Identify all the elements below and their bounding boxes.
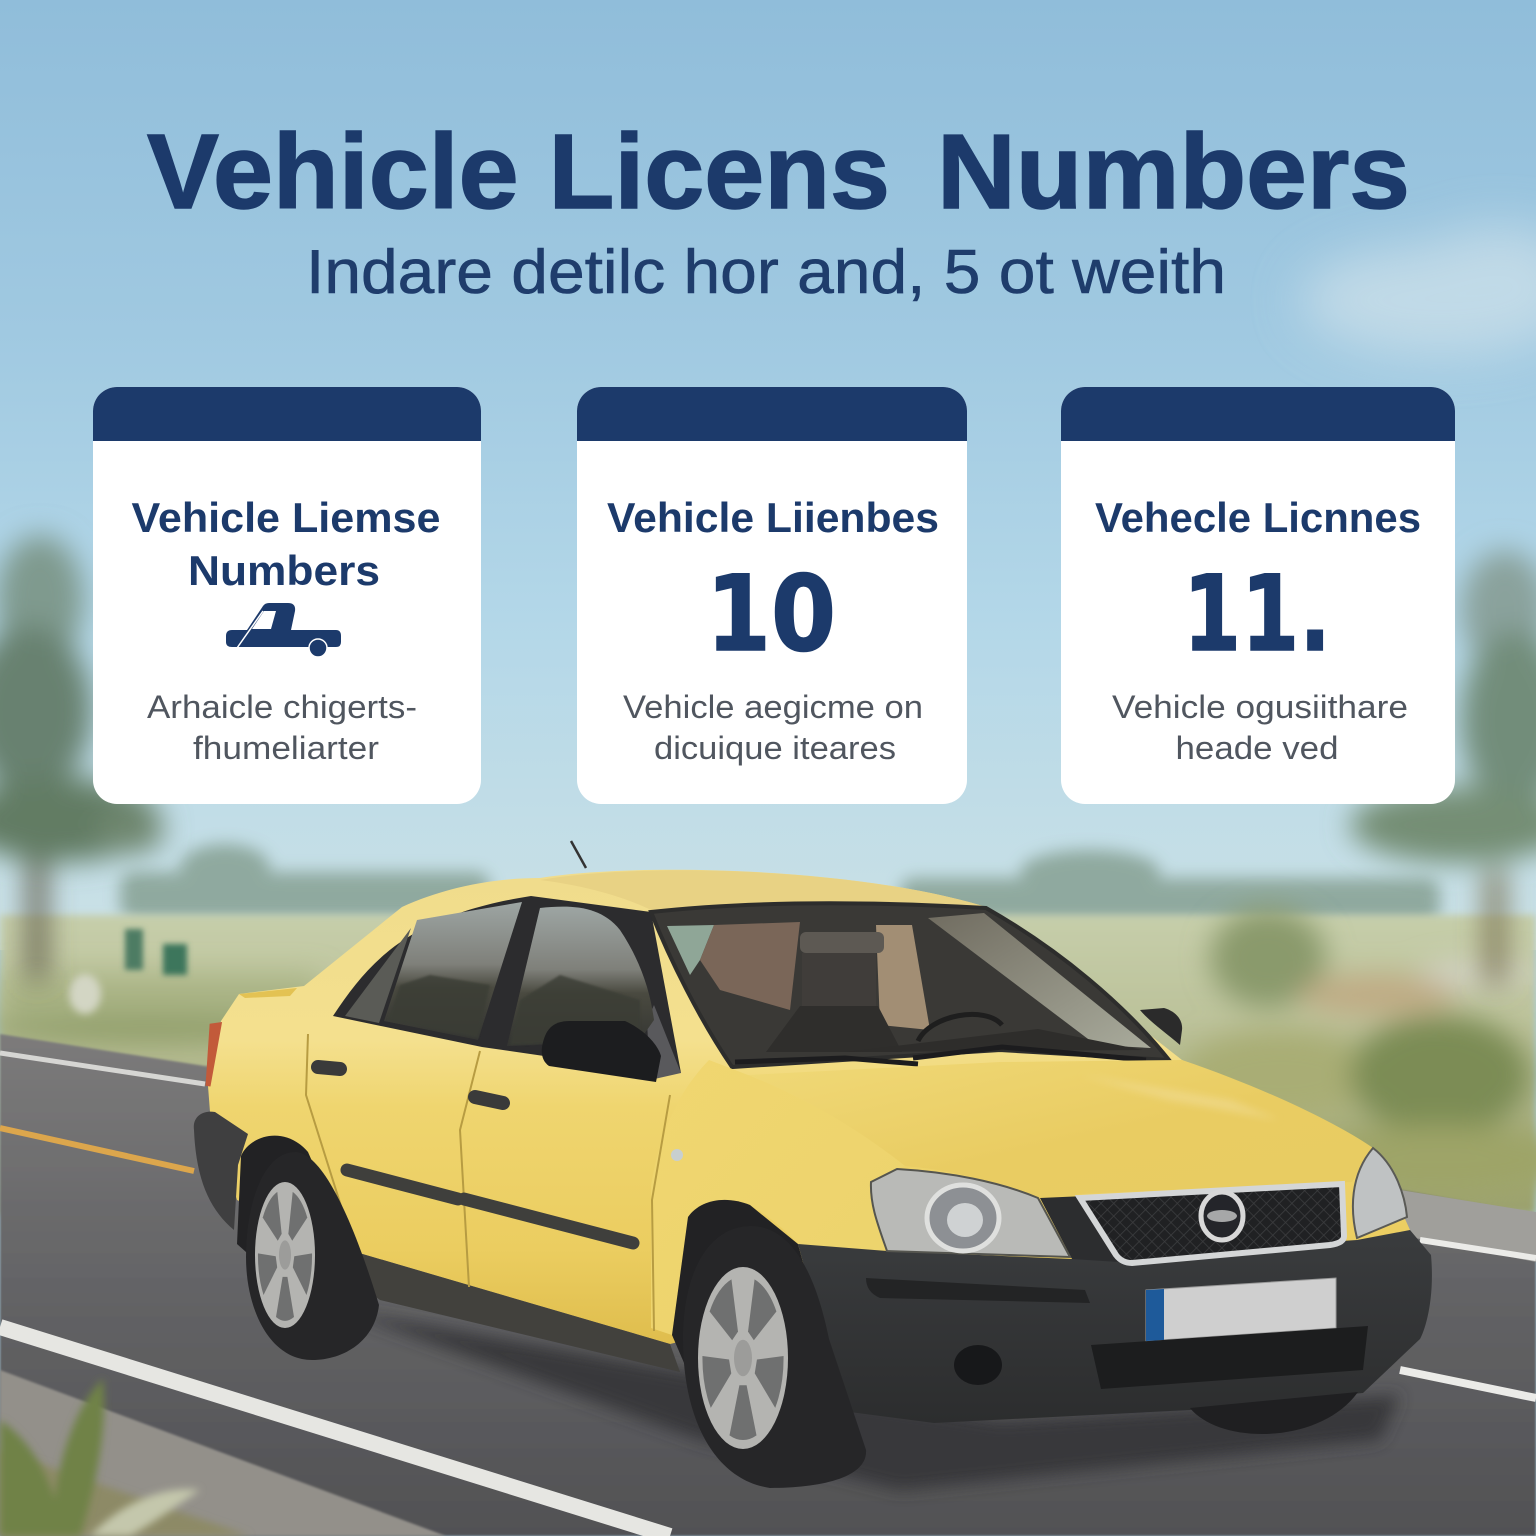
card 3 description: heade ved bbox=[1176, 730, 1338, 766]
card 1 heading: Numbers bbox=[188, 547, 380, 594]
foreground plant bbox=[0, 1379, 200, 1536]
window frame bbox=[333, 896, 681, 1073]
headlight left bbox=[871, 1169, 1070, 1257]
background: cloud bbox=[1300, 227, 1536, 355]
card 2 description: dicuique iteares bbox=[654, 730, 896, 766]
road bbox=[0, 1034, 1536, 1536]
windshield interior bbox=[667, 913, 1151, 1052]
front door window bbox=[507, 907, 654, 1046]
card 1 heading: Vehicle Liemse bbox=[132, 494, 440, 541]
panel: card 1 bbox=[93, 387, 481, 804]
side mirror left bbox=[542, 1021, 661, 1082]
lower grille bbox=[1091, 1326, 1368, 1389]
window tree reflections bbox=[388, 975, 640, 1045]
car bbox=[194, 841, 1432, 1490]
dark band between headlight and grille bbox=[1040, 1196, 1135, 1263]
fuel cap and side marker bbox=[671, 1149, 683, 1161]
rear wheel bbox=[246, 1152, 379, 1360]
background: right tree bbox=[1350, 550, 1536, 985]
title: Vehicle Licens bbox=[147, 113, 890, 231]
mirror mount triangle bbox=[647, 1005, 681, 1080]
rear door window bbox=[384, 902, 522, 1040]
card 3 description: Vehicle ogusiithare bbox=[1112, 689, 1408, 725]
rear bumper bbox=[194, 1112, 248, 1230]
side rub strips bbox=[347, 1170, 633, 1243]
car antenna bbox=[571, 841, 586, 868]
door seams bbox=[306, 1034, 670, 1331]
far front wheel bbox=[1190, 1392, 1358, 1434]
taillight bbox=[208, 1025, 219, 1086]
badge bbox=[1201, 1192, 1243, 1240]
subtitle: Indare detilc hor and, 5 ot weith bbox=[306, 238, 1226, 307]
car sill bbox=[342, 1248, 680, 1372]
card 2 number: 10 bbox=[706, 553, 836, 675]
card 3 heading: Vehecle Licnnes bbox=[1095, 494, 1421, 541]
headlight right bbox=[1353, 1148, 1407, 1238]
rear quarter window bbox=[345, 928, 411, 1023]
bumper scuff strip bbox=[866, 1278, 1090, 1303]
front fender bbox=[651, 1060, 905, 1335]
background: fields bbox=[0, 915, 1536, 1215]
grille bbox=[1080, 1184, 1344, 1263]
hood bbox=[748, 1060, 1373, 1201]
wipers bbox=[735, 1047, 1146, 1064]
background: left tree bbox=[0, 535, 164, 980]
fog light bbox=[954, 1345, 1002, 1385]
title bbox=[147, 113, 1410, 231]
background: sky bbox=[0, 0, 1536, 950]
background: distant tree line bbox=[120, 844, 1440, 924]
panel: card 2 bbox=[577, 387, 967, 804]
background: roadside flowers bbox=[69, 974, 101, 1014]
hood highlight bbox=[1080, 1075, 1280, 1120]
front wheel arch bbox=[672, 1200, 829, 1400]
side mirror right bbox=[1140, 1008, 1182, 1045]
card 1 description: fhumeliarter bbox=[193, 730, 379, 766]
panel: card 3 bbox=[1061, 387, 1455, 804]
car spoiler bbox=[239, 988, 297, 998]
card 1 description: Arhaicle chigerts- bbox=[147, 689, 417, 725]
front wheel bbox=[683, 1226, 866, 1488]
card 2 description: Vehicle aegicme on bbox=[623, 689, 923, 725]
title: Numbers bbox=[937, 113, 1410, 231]
windshield bbox=[651, 903, 1169, 1067]
car body side bbox=[208, 870, 1410, 1344]
license plate bbox=[1146, 1278, 1336, 1341]
car roof bbox=[540, 870, 986, 910]
door handles bbox=[318, 1067, 503, 1103]
front bumper bbox=[798, 1230, 1432, 1423]
card 3 number: 11. bbox=[1183, 553, 1331, 675]
car shadow bbox=[340, 1310, 1400, 1490]
card 2 heading: Vehicle Liienbes bbox=[607, 494, 939, 541]
rear wheel arch bbox=[237, 1136, 370, 1300]
icon: pickup truck bbox=[226, 603, 341, 657]
background: roadside boxes bbox=[125, 929, 187, 975]
